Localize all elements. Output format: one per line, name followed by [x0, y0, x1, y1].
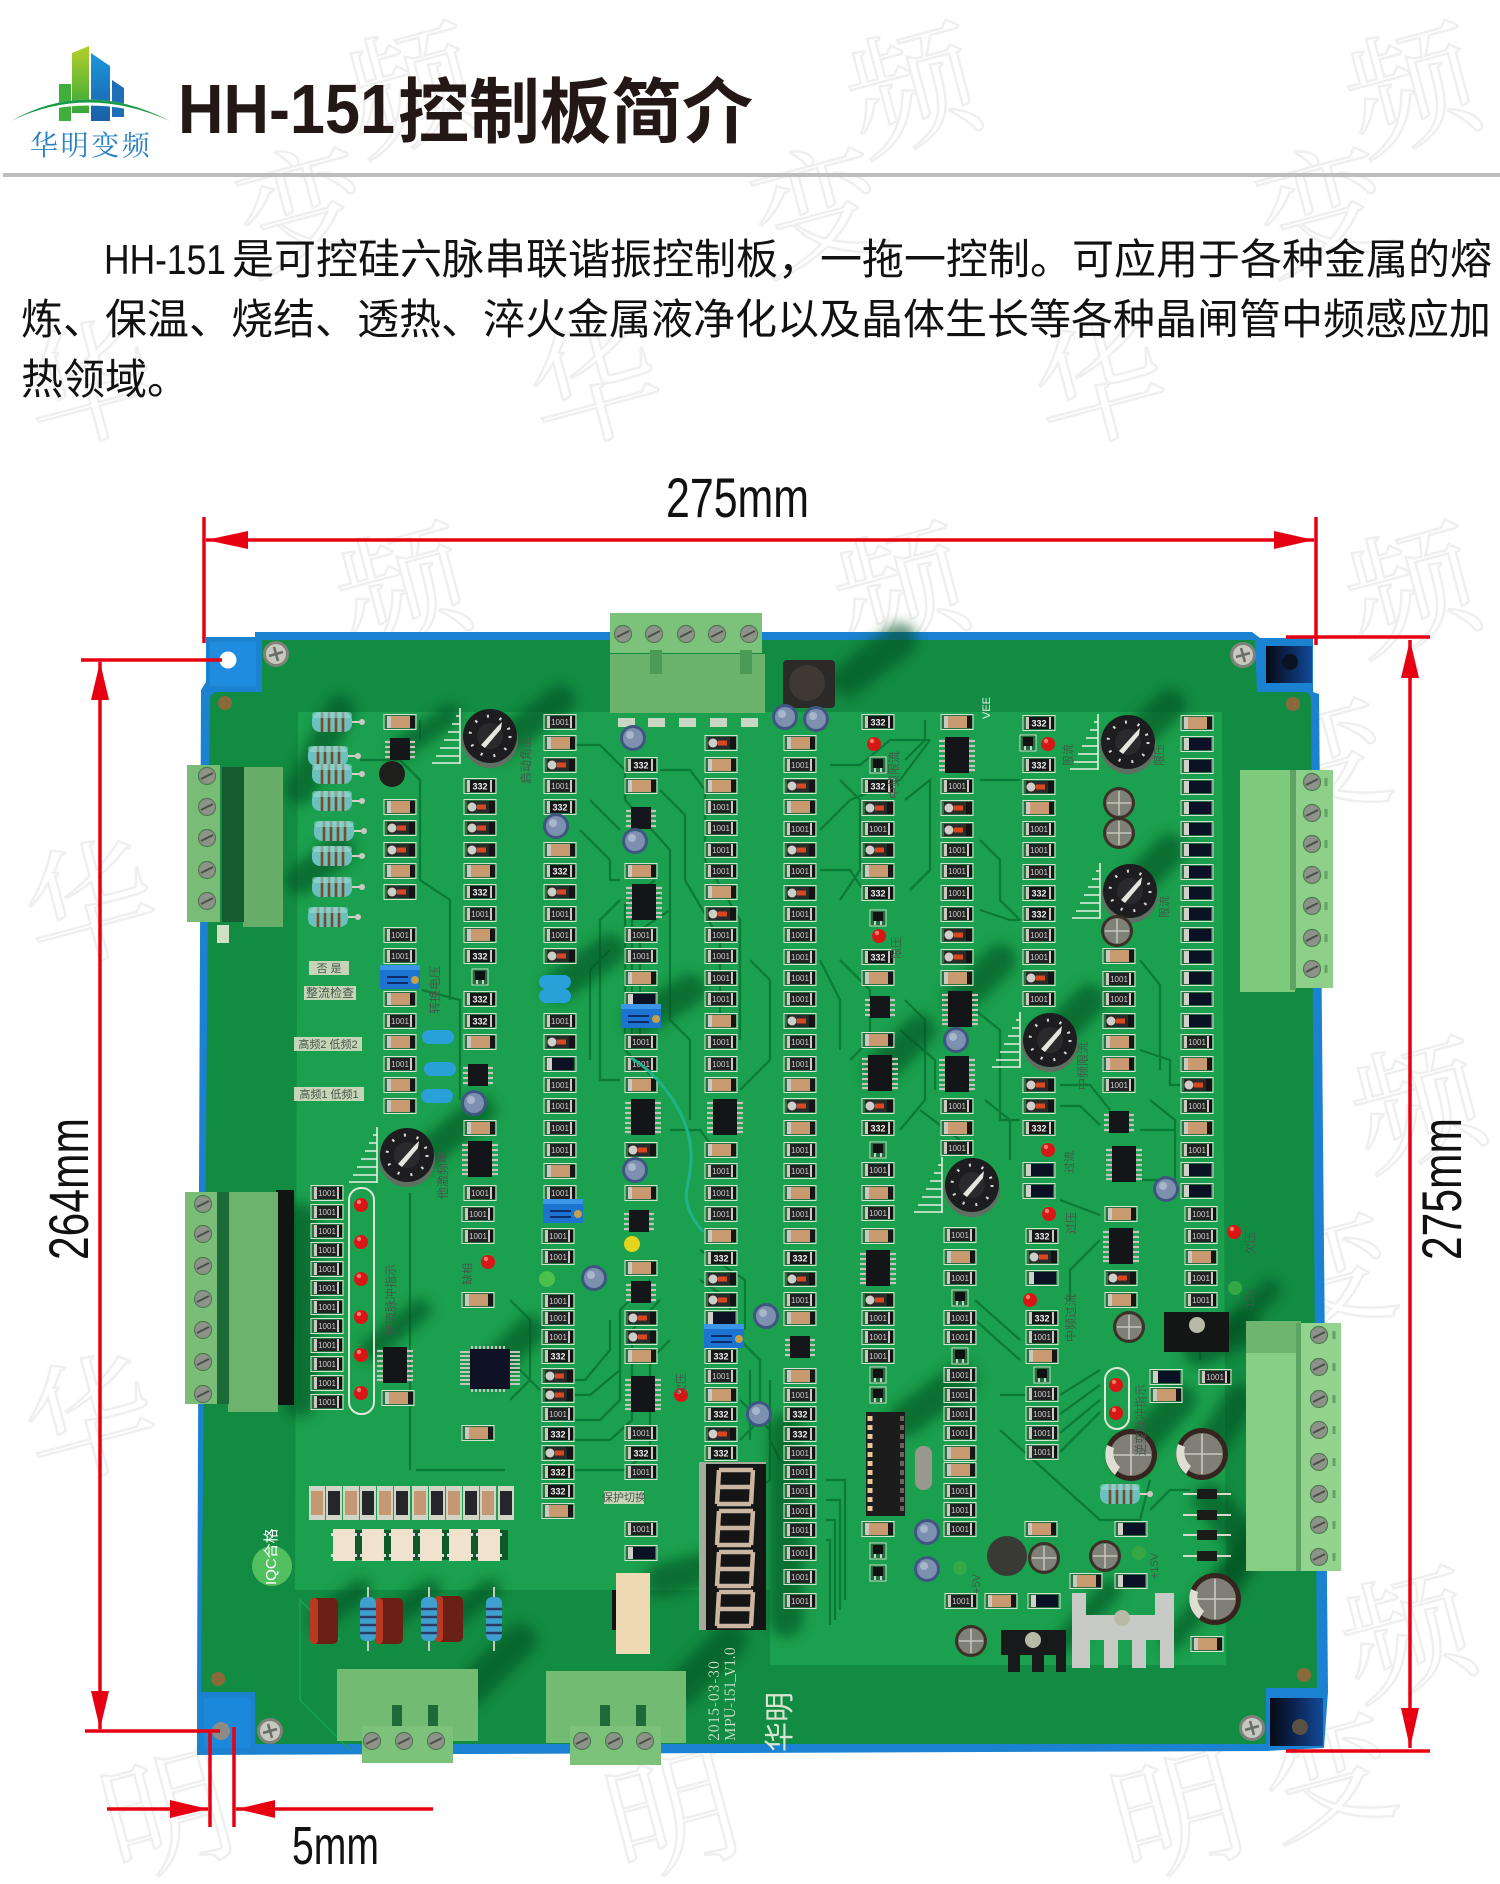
silkscreen labels: 否 是	[316, 962, 342, 975]
resistor capacitor column 5	[705, 736, 743, 1460]
silkscreen labels: 转换电压	[427, 966, 442, 1014]
silkscreen labels: 保护切换	[602, 1490, 646, 1504]
component shadows	[300, 640, 1270, 1690]
background watermark characters: 频	[812, 474, 988, 689]
silkscreen labels: 欠压	[1243, 1232, 1257, 1254]
silkscreen labels: 过压	[1065, 1212, 1078, 1234]
push button	[783, 660, 835, 708]
board version mark: 华明	[764, 1692, 797, 1752]
resistor capacitor column 10	[1103, 948, 1142, 1308]
resistor capacitor column 2	[462, 778, 498, 1200]
background watermark characters: 变	[1239, 1659, 1413, 1874]
silkscreen labels: 欠压	[674, 1373, 688, 1395]
background watermark characters: 华	[1, 789, 175, 1004]
dimension: hole spacing 264mm left	[37, 660, 222, 1731]
silkscreen labels: 中频限流	[1075, 1042, 1090, 1090]
silkscreen labels: +15V	[1149, 1552, 1161, 1579]
silkscreen labels: 限压	[1153, 744, 1166, 766]
right terminal connector lower	[1246, 1321, 1341, 1571]
resistor capacitor column 4	[624, 758, 662, 1560]
title: HH-151	[178, 70, 395, 148]
introduction paragraph: HH-151	[104, 236, 226, 283]
header rule	[3, 173, 1500, 177]
silkscreen labels: 整流脉冲指示	[383, 1264, 398, 1336]
snubber capacitors and resistors	[310, 1587, 502, 1651]
four digit LED display	[699, 1462, 766, 1630]
green PCB	[201, 640, 1317, 1744]
title: 控制板简介	[398, 74, 753, 153]
optocouplers	[331, 1529, 508, 1561]
IQC sticker: IQC合格	[263, 1528, 280, 1585]
blue mounting plate	[197, 632, 1328, 1755]
dimension: height 275mm right: 275mm	[1410, 1118, 1473, 1260]
silkscreen labels: 缺相	[460, 1263, 474, 1285]
background watermark characters: 变	[1234, 644, 1408, 859]
resistor capacitor column 3	[542, 714, 576, 1518]
blue trimmers and film capacitors	[380, 965, 744, 1348]
background watermark characters: 频	[1319, 1519, 1495, 1734]
dimension: width 275mm top: 275mm	[666, 466, 809, 529]
silkscreen labels: 中频过流	[1063, 1294, 1078, 1342]
background watermark characters: 变	[214, 94, 388, 309]
logo: Huaming Inverter: 华明变频	[30, 124, 152, 164]
background watermark characters: 华	[1011, 269, 1185, 484]
background watermark characters: 频	[314, 474, 490, 689]
background watermark characters: 频	[1329, 989, 1500, 1204]
dimension: width 275mm top	[204, 466, 1316, 645]
pulse resistor column	[311, 1186, 343, 1410]
title	[178, 70, 753, 153]
silkscreen labels: 限流	[1157, 896, 1171, 918]
green jumper wire	[631, 1058, 703, 1232]
background watermark characters: 变	[729, 94, 903, 309]
background watermark characters: 华	[1, 269, 175, 484]
resistor capacitor column 1	[384, 714, 416, 1114]
loose components lower left	[377, 1206, 1231, 1652]
dimension: hole spacing 264mm left: 264mm	[37, 1118, 100, 1260]
small electrolytic capacitors	[379, 704, 1179, 1582]
resistor capacitor column 9	[1020, 716, 1058, 1460]
introduction paragraph: 是可控硅六脉串联谐振控制板，一拖一控制。可应用于各种金属的熔	[232, 236, 1492, 283]
silkscreen labels: 高频1 低频1	[299, 1087, 359, 1101]
silkscreen labels: 启动角度	[518, 736, 533, 784]
top terminal connector	[610, 613, 765, 727]
lighter component area	[295, 712, 1226, 1665]
silkscreen labels: 整流检查	[306, 985, 354, 1000]
introduction paragraph: 炼、保温、烧结、透热、淬火金属液净化以及晶体生长等各种晶闸管中频感应加	[21, 296, 1491, 343]
right terminal connector upper	[1240, 770, 1333, 992]
silkscreen labels: 高频2 低频2	[298, 1037, 358, 1051]
IQC sticker	[252, 1528, 292, 1586]
background watermark characters: 变	[1239, 1159, 1413, 1374]
power diodes	[1183, 1489, 1231, 1561]
left terminal connector upper	[187, 765, 283, 943]
dimension: hole diameter 5mm	[107, 1727, 433, 1876]
relay	[612, 1573, 650, 1654]
board version mark: 2015-03-30	[704, 1660, 724, 1741]
background watermark characters: 频	[1323, 474, 1499, 689]
bottom terminal connector right	[546, 1671, 686, 1765]
large electrolytic capacitors	[955, 1311, 1241, 1657]
left terminal connector lower	[185, 1190, 294, 1412]
dimension: height 275mm right	[1286, 637, 1473, 1751]
silkscreen labels: 过流	[1062, 1151, 1076, 1173]
QFP microcontroller	[460, 1346, 520, 1392]
background watermark characters: 华	[506, 269, 680, 484]
corner tabs	[204, 642, 1323, 1748]
board version mark: MPU-151_V1.0	[720, 1647, 740, 1741]
circuit board photo	[185, 613, 1341, 1765]
silkscreen labels: 限流	[1061, 744, 1075, 766]
background watermark characters: 变	[1234, 94, 1408, 309]
silkscreen labels: 逆变脉冲指示	[1133, 1384, 1148, 1456]
resistor capacitor column 7	[860, 714, 898, 1581]
corner screws and holes	[211, 641, 1311, 1744]
bottom terminal connector left	[337, 1669, 478, 1763]
silkscreen labels: -15V	[1245, 1288, 1257, 1312]
silkscreen labels: 他激频率	[435, 1151, 450, 1199]
capacitor resistor row	[309, 1486, 514, 1520]
adjustment potentiometers	[349, 708, 1158, 1217]
silkscreen labels: 限压	[890, 937, 903, 959]
board version mark	[704, 1647, 797, 1752]
silkscreen labels	[294, 697, 1257, 1594]
resistor capacitor column 8	[939, 714, 978, 1536]
introduction paragraph: 热领域。	[21, 356, 189, 403]
dimension: hole diameter 5mm: 5mm	[292, 1816, 379, 1876]
background watermark characters: 华	[1, 1304, 175, 1519]
LED indicators	[349, 737, 1242, 1575]
power resistors	[308, 712, 1153, 1504]
silkscreen labels: VEE	[981, 697, 993, 719]
resistor capacitor column 6	[784, 736, 816, 1608]
resistor capacitor column 11	[1181, 716, 1217, 1308]
heat sinks	[1001, 1312, 1229, 1672]
introduction paragraph	[21, 236, 1492, 403]
copper traces	[300, 720, 1200, 1750]
silkscreen labels: 中频限流	[886, 751, 901, 799]
DIP chip and crystal	[866, 1412, 932, 1516]
logo: Huaming Inverter	[11, 46, 170, 164]
silkscreen labels: +5V	[971, 1573, 983, 1594]
